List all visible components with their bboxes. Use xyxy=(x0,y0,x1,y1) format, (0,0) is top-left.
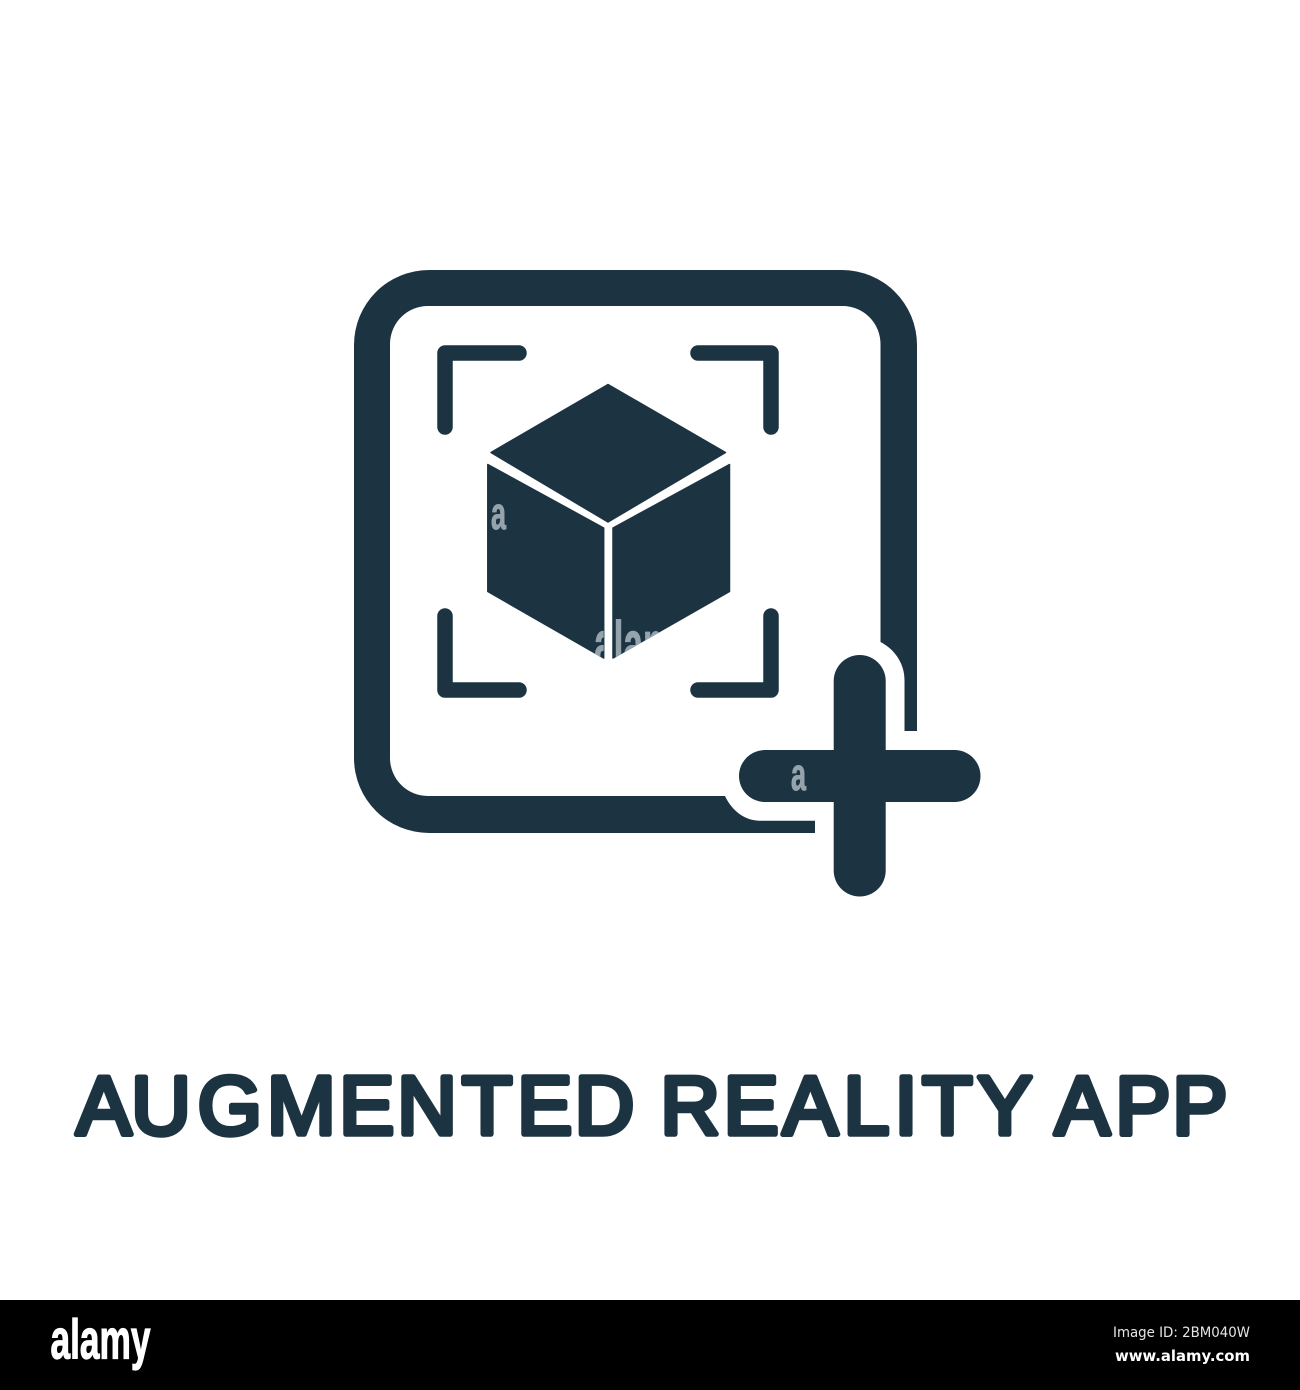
website: www.alamy.com xyxy=(1115,1347,1250,1365)
footer bar xyxy=(0,1300,1300,1390)
footer logo: alamy xyxy=(50,1308,150,1370)
icon: scan corner brackets xyxy=(445,353,771,690)
watermark: word clipped by cube: alamy xyxy=(594,608,694,680)
watermark: letter on plus: a xyxy=(791,749,807,800)
icon: 3D cube xyxy=(488,384,730,658)
title: AUGMENTED REALITY APP xyxy=(76,1060,1227,1152)
icon: rounded screen frame xyxy=(354,270,917,833)
icon: augmented reality app xyxy=(354,270,980,896)
icon: plus sign xyxy=(739,655,980,896)
image id: Image ID: 2BM040W xyxy=(1113,1325,1250,1341)
watermark: letter on cube: a xyxy=(491,488,507,539)
